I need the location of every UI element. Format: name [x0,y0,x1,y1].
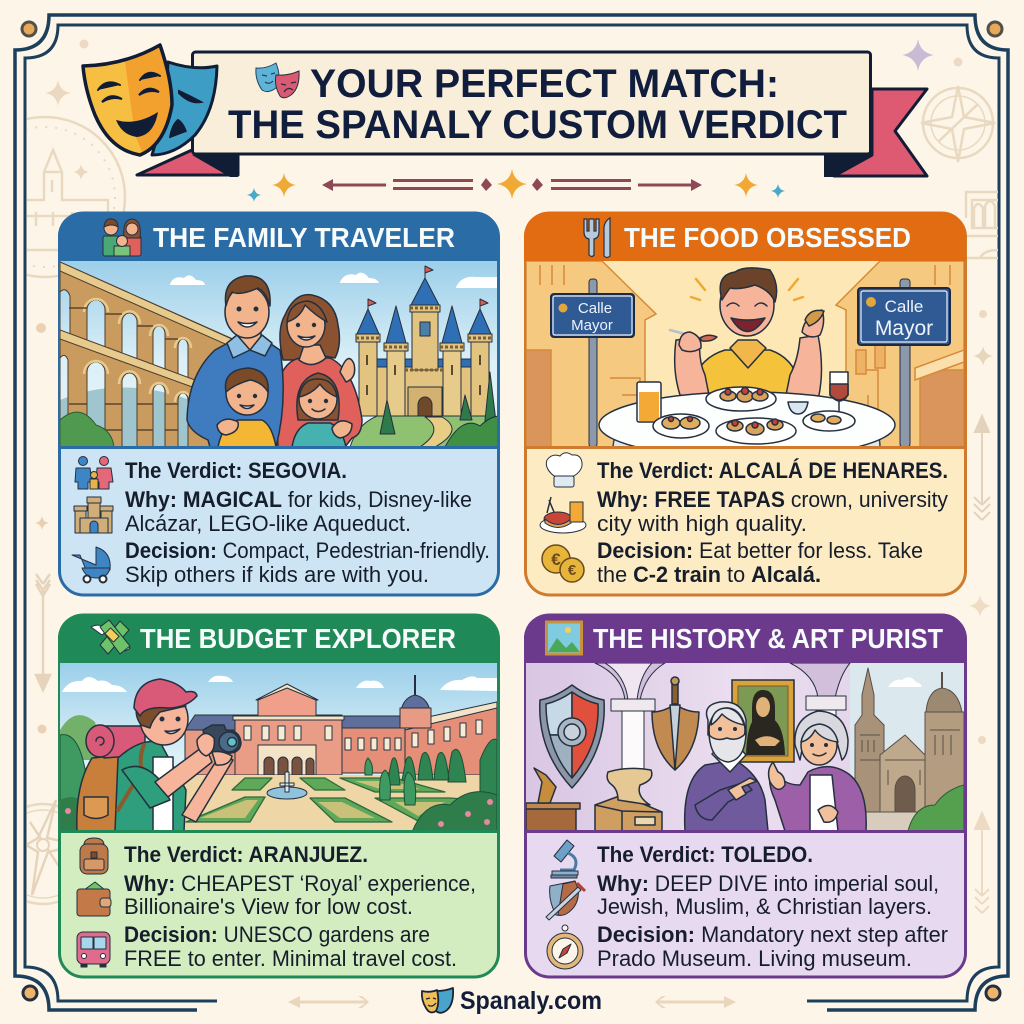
panel: the history and art purist [524,614,966,977]
verdict text: Decision: Compact, Pedestrian-friendly. [125,538,490,563]
fountain [267,772,307,799]
icon: euro coins [542,545,584,582]
icon: euro coins: € [568,562,577,579]
icon: stroller [72,547,110,582]
street sign right: Mayor [875,317,933,340]
rays [691,279,803,300]
verdict text: Alcázar, LEGO-like Aqueduct. [125,511,411,536]
figure: boy [217,368,276,447]
woman [769,711,866,831]
verdict text [597,842,948,971]
panel body [526,213,966,595]
verdict text: The Verdict: ALCALÁ DE HENARES. [597,458,948,483]
garden [184,775,480,830]
panel: the family traveler [58,212,510,595]
footer logo [422,987,602,1015]
arrow, right lower [975,813,989,913]
small masks in title [256,63,299,98]
verdict text: Why: MAGICAL for kids, Disney-like [125,487,472,512]
footer arrows [288,996,736,1008]
statuette on table [526,768,580,831]
panel header [58,614,499,663]
building sketch, right [966,192,998,258]
separator line [526,830,964,833]
hedges and trees [364,738,497,806]
verdict text: Why: DEEP DIVE into imperial soul, [597,871,939,896]
verdict text: The Verdict: SEGOVIA. [125,458,347,483]
arches and columns [594,663,850,768]
castle [350,266,510,447]
compass, lower left [27,800,58,906]
verdict text: Billionaire's View for low cost. [124,894,413,919]
left ribbon tail [137,150,238,177]
scene: museum and Toledo [526,663,964,831]
verdict text: Decision: Mandatory next step after [597,922,948,947]
compass, upper right [921,86,995,162]
verdict text: the C-2 train to Alcalá. [597,562,821,587]
icon: shield and sword [546,881,585,920]
icon: bus [77,932,110,967]
cathedral sky [850,663,964,778]
divider with arrows and stars [247,169,785,202]
sword and shield [652,677,699,770]
cathedral [850,668,964,831]
title ribbon and banner: THE SPANALY CUSTOM VERDICT [228,103,847,147]
verdict text: city with high quality. [597,511,807,536]
verdict text: The Verdict: ARANJUEZ. [124,842,368,867]
panel: the food obsessed [524,212,966,595]
banner panel [192,52,870,154]
verdict text: Skip others if kids are with you. [125,562,429,587]
icon: tapas and drink [540,497,586,533]
icon: euro coins: € [551,550,561,569]
verdict text: Decision: UNESCO gardens are [124,922,430,947]
scene: diner on Calle Mayor [526,261,964,458]
brand name: Spanaly.com [460,987,602,1015]
heading: THE HISTORY & ART PURIST [593,623,943,654]
panel header [524,212,966,261]
heading: THE BUDGET EXPLORER [140,623,456,654]
panel body [60,213,498,595]
verdict text [124,842,476,971]
street sign right [858,279,950,447]
backpacker [77,679,241,831]
panel header [58,212,499,261]
figure: girl [292,373,352,447]
man [685,702,768,831]
palace [185,675,497,775]
title ribbon and banner [137,52,927,177]
shield [540,685,604,788]
verdict text [125,458,490,587]
bust on pedestal [595,768,662,831]
verdict text: Decision: Eat better for less. Take [597,538,923,563]
seal with building, left [27,116,126,278]
scene: backpacker at Aranjuez palace [60,663,497,832]
panel body [526,615,966,977]
arrow, right upper [974,416,990,520]
large theatre masks [83,45,217,155]
scene: aqueduct, family and castle [60,261,510,447]
icon: family [103,219,141,256]
street sign right: Calle [885,297,923,316]
aqueduct [60,262,235,447]
verdict text: Why: FREE TAPAS crown, university [597,487,948,512]
figure: mother [276,295,362,447]
panel header [524,614,966,663]
verdict text: Prado Museum. Living museum. [597,946,912,971]
man eating [670,268,824,400]
icon: compass [547,925,583,969]
separator line [526,446,964,449]
buildings [526,261,964,447]
table and food [598,371,896,446]
icon: framed landscape [546,622,582,654]
figure: father [187,276,283,447]
title text: YOUR PERFECT MATCH: [310,62,779,106]
street sign left: Mayor [571,317,613,334]
street sign left [551,279,634,447]
street sign left: Calle [578,300,612,317]
verdict text: Jewish, Muslim, & Christian layers. [597,894,932,919]
panel body [60,615,498,977]
verdict text: The Verdict: TOLEDO. [597,842,813,867]
painting [732,680,794,762]
heading: THE FAMILY TRAVELER [153,222,455,253]
icon: microscope [551,840,578,878]
verdict text: Why: CHEAPEST ‘Royal’ experience, [124,871,476,896]
icon: chef hat [546,453,582,487]
icon: fork and knife [584,218,610,258]
verdict text [597,458,948,587]
separator line [60,446,497,449]
heading: THE FOOD OBSESSED [624,222,911,253]
icon: backpack [80,838,108,874]
icon: footer masks [422,988,453,1013]
right ribbon tail [824,89,927,177]
ground, bush [60,412,114,447]
verdict text: FREE to enter. Minimal travel cost. [124,946,457,971]
panel: the budget explorer [58,614,499,977]
separator line [60,830,497,833]
icon: castle [74,497,113,533]
icon: wallet [77,882,111,916]
arrow, left [36,574,50,690]
icon: flying money [91,620,130,654]
icon: parents and child [75,456,113,489]
